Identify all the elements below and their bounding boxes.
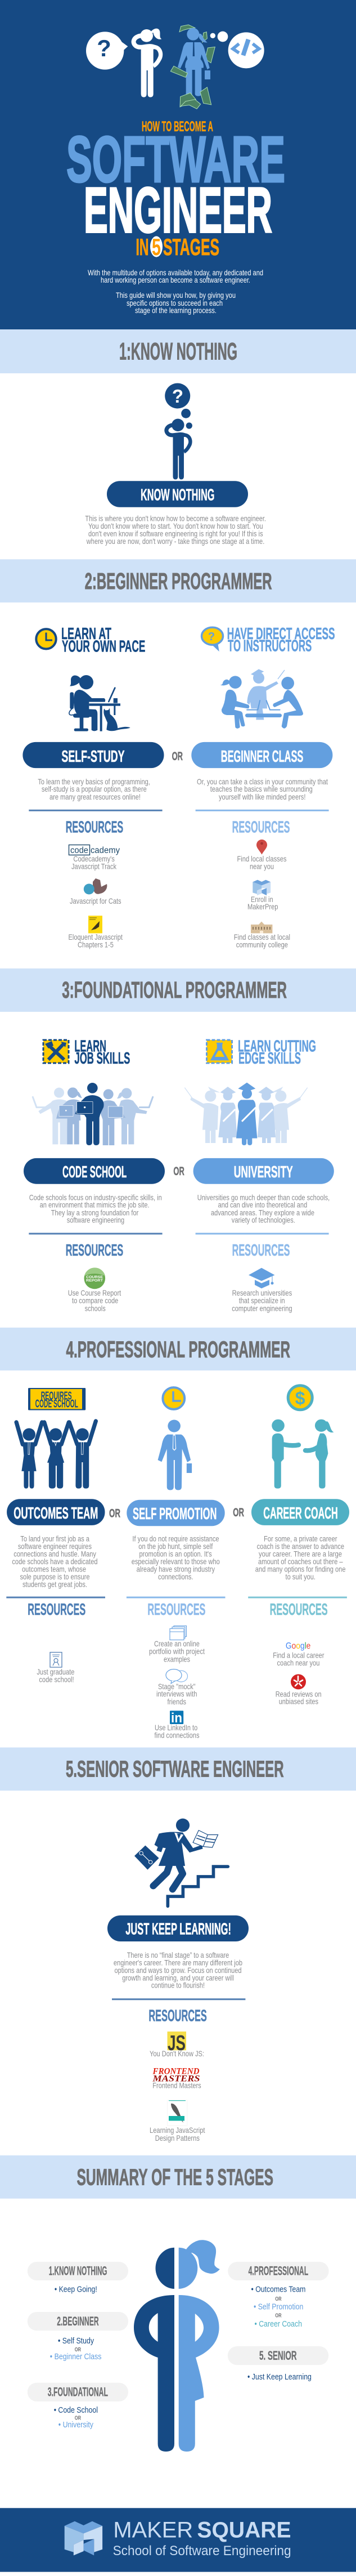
summary: stage 3: • Code School <box>54 2406 98 2415</box>
title: IN <box>136 234 148 260</box>
heading: resources left: RESOURCES <box>66 818 123 836</box>
summary: stage 4: OR <box>275 2312 282 2319</box>
text: outcomes team description: code schools have a dedicated <box>12 1557 98 1566</box>
pill: self-study <box>22 742 164 768</box>
label: or: OR <box>233 1506 244 1519</box>
resource: eloquent javascript: Chapters 1-5 <box>78 940 114 949</box>
pill: self promotion: SELF PROMOTION <box>133 1505 217 1523</box>
resource: local classes: near you <box>250 861 274 870</box>
resource: community college: Find classes at local <box>234 932 290 941</box>
heading: resources right: RESOURCES <box>232 1242 290 1260</box>
summary: stage 1: 1.KNOW NOTHING <box>49 2264 107 2278</box>
summary: stage 4 <box>228 2262 329 2329</box>
resource: mock interviews: friends <box>168 1697 186 1706</box>
resource: research universities: computer engineering <box>232 1303 292 1312</box>
text: code school description: an environment that mimics the job site. <box>40 1200 150 1209</box>
icon: student at laptop with cat <box>69 675 130 731</box>
hero illustration <box>86 25 264 109</box>
summary: stage 2 <box>28 2312 128 2361</box>
resource: community college <box>234 922 290 949</box>
resource: codecademy: Codecademy's <box>73 854 115 863</box>
resource: google: Find a local career <box>273 1651 325 1660</box>
icon: confused woman figure <box>134 29 161 97</box>
text: beginner class description: teaches the basics while surrounding <box>210 784 313 793</box>
pill: code school: CODE SCHOOL <box>62 1163 127 1181</box>
resource: local classes: Find local classes <box>237 854 287 863</box>
summary: stage 4: • Career Coach <box>254 2320 302 2329</box>
summary: stage 3: • University <box>58 2421 94 2430</box>
title: 5 <box>152 234 161 260</box>
illustration: woman climbing stairs <box>134 1819 228 1906</box>
resource: course report <box>68 1267 121 1312</box>
resource: online portfolio <box>170 1626 187 1640</box>
text: beginner class description <box>197 777 328 801</box>
icon: falling money bills front <box>170 66 211 109</box>
pill: just keep learning <box>107 1916 249 1941</box>
text: self promotion description <box>132 1534 220 1581</box>
panel: stage 1 <box>85 383 266 546</box>
text: self-study description: are many great resources online! <box>49 792 141 801</box>
resource: graduate code school: Just graduate <box>37 1667 75 1676</box>
pill: university <box>193 1158 334 1184</box>
intro text: With the multitude of options available today, any dedicated and <box>88 268 263 277</box>
heading: learn job skills: JOB SKILLS <box>74 1050 130 1068</box>
text: outcomes team description: To land your first job as a <box>20 1534 89 1543</box>
wordmark: MAKER <box>113 2518 193 2543</box>
text: university description <box>197 1193 330 1225</box>
text: self promotion description: on the job hunt, simple self <box>138 1542 213 1551</box>
summary: stage 2: 2.BEGINNER <box>57 2314 99 2328</box>
icon: question bubble: ? <box>208 631 215 643</box>
heading: learn job skills <box>74 1037 130 1068</box>
heading: stage 2 <box>0 559 356 602</box>
pill: beginner class <box>191 742 332 768</box>
intro text: This guide will show you how, by giving you <box>116 291 236 300</box>
heading: summary <box>0 2155 356 2199</box>
heading: learn cutting edge skills: EDGE SKILLS <box>238 1050 301 1068</box>
resource: eloquent javascript: Eloquent Javascript <box>69 932 123 941</box>
pill: career coach <box>251 1499 349 1525</box>
text: university description: variety of technologies. <box>232 1216 295 1225</box>
text: portfolio: examples <box>164 1654 190 1663</box>
text: career coach description: For some, a private career <box>264 1534 337 1543</box>
text: stage 5 description: engineer's career. There are many different job <box>114 1958 242 1967</box>
illustration: university graduates <box>184 1083 308 1145</box>
resource: course report: REPORT <box>86 1279 103 1283</box>
panel: stage 3 <box>24 1037 334 1312</box>
heading: resources left: RESOURCES <box>66 1242 123 1260</box>
text: self promotion description: promotion is an option. It's <box>139 1550 212 1559</box>
pill: self promotion <box>127 1500 225 1526</box>
title: STAGES <box>163 234 219 260</box>
resource: research universities: Research universities <box>232 1288 292 1297</box>
text: portfolio: portfolio with project <box>149 1646 205 1655</box>
wordmark: School of Software Engineering <box>113 2543 291 2559</box>
icon: question bubble <box>201 627 223 649</box>
resource: google: Google <box>286 1641 310 1651</box>
panel: stage 5 <box>107 1819 249 2142</box>
text: outcomes team description: software engineer requires <box>18 1542 92 1551</box>
resource: javascript for cats: Javascript for Cats <box>70 896 121 905</box>
resource: yelp <box>276 1674 322 1706</box>
title <box>66 119 285 260</box>
heading: resources middle: RESOURCES <box>147 1601 205 1619</box>
intro text: stage of the learning process. <box>135 306 217 315</box>
resource: you dont know js: You Don't Know JS: <box>150 2049 204 2058</box>
text: stage 1 description: don't even know if software engineering is right for you! If this is <box>88 529 263 538</box>
text: portfolio <box>149 1639 205 1663</box>
text: self-study description: self-study is a popular option, as there <box>42 784 147 793</box>
heading: stage 5 <box>0 1748 356 1791</box>
icon: confused figure <box>166 419 190 480</box>
resource: makerprep: Enroll in <box>251 895 273 904</box>
pill: outcomes team: OUTCOMES TEAM <box>13 1504 98 1523</box>
heading: learn at your own pace <box>61 625 145 655</box>
summary: stage 5: 5. SENIOR <box>259 2349 297 2363</box>
resource: makerprep: MakerPrep <box>247 902 278 911</box>
text: stage 5 description: growth and learning, and your career will <box>122 1973 234 1982</box>
text: stage 1 description: You don't know where to start. You don't know how to start. You <box>88 521 263 530</box>
icon: clock <box>36 629 56 649</box>
resource: course report: to compare code <box>72 1296 118 1305</box>
label: or: OR <box>173 1165 184 1178</box>
resource: course report: schools <box>85 1303 106 1312</box>
resource: graduate code school <box>37 1652 75 1684</box>
heading: stage 3 <box>0 968 356 1012</box>
panel: hero <box>0 0 356 329</box>
icon: falling money bills behind <box>179 25 215 63</box>
illustration: outcomes team <box>16 1421 96 1489</box>
resource: graduate code school: code school! <box>39 1675 74 1684</box>
icon: clock <box>163 1387 184 1409</box>
text: beginner class description: yourself with like minded peers! <box>219 792 305 801</box>
text: outcomes team description: outcomes team, whose <box>22 1565 86 1574</box>
illustration: split figure <box>134 2240 220 2452</box>
pill: self-study: SELF-STUDY <box>61 748 125 766</box>
intro text: hard working person can become a software engineer. <box>101 275 250 284</box>
text: self promotion description: If you do not require assistance <box>132 1534 219 1543</box>
resource: javascript design patterns: Learning JavaScript <box>150 2126 205 2135</box>
resource: google <box>273 1641 325 1667</box>
icon: makersquare logo <box>65 2521 102 2555</box>
resource: mock interviews: interviews with <box>156 1689 197 1698</box>
text: self promotion description: already have strong industry <box>137 1565 215 1574</box>
text: stage 5 description <box>114 1950 242 1990</box>
text: outcomes team description: connections and hustle. Many <box>13 1550 96 1559</box>
resource: google: coach near you <box>277 1658 319 1667</box>
resource: frontend masters: FRONTEND <box>152 2066 200 2077</box>
resource: linkedin: in <box>171 1711 182 1726</box>
wordmark: SQUARE <box>197 2518 291 2543</box>
text: outcomes team description: sole purpose is to ensure <box>20 1572 90 1581</box>
panel: stage 4 <box>6 1386 349 1739</box>
panel: footer <box>0 2508 356 2572</box>
resource: research universities: that specialize in <box>239 1296 285 1305</box>
resource: frontend masters: Frontend Masters <box>152 2081 201 2090</box>
heading: learn job skills: LEARN <box>74 1037 106 1055</box>
summary: stage 1: • Keep Going! <box>55 2285 97 2294</box>
resource: yelp: Read reviews on <box>276 1689 322 1698</box>
label: or: OR <box>172 750 183 763</box>
panel: stage 2 <box>22 625 335 949</box>
text: self-study description: To learn the very basics of programming, <box>38 777 150 786</box>
necktie <box>193 42 195 56</box>
resource: local classes <box>237 840 287 870</box>
icon: question speech bubble: ? <box>97 35 111 61</box>
icon: code bubble <box>228 32 264 68</box>
text: career coach description <box>255 1534 346 1581</box>
summary: stage 4: OR <box>275 2296 282 2302</box>
summary: stage 4: • Outcomes Team <box>251 2285 305 2294</box>
resource: course report: Use Course Report <box>68 1288 121 1297</box>
text: self promotion description: especially relevant to those who <box>132 1557 220 1566</box>
summary: stage 1 <box>28 2262 128 2294</box>
title: HOW TO BECOME A <box>142 119 213 135</box>
icon: dollar coin: $ <box>295 1388 305 1408</box>
text: code school description <box>29 1193 162 1225</box>
text: stage 5 description: continue to flourish! <box>151 1981 205 1990</box>
resource: course report: COURSE <box>86 1275 103 1279</box>
summary: stage 5: • Just Keep Learning <box>247 2373 312 2382</box>
summary: stage 2: OR <box>75 2346 81 2353</box>
heading: direct access <box>227 625 335 655</box>
icon: professional woman figure <box>178 28 210 97</box>
text: code school description: They lay a strong foundation for <box>51 1208 139 1217</box>
heading: stage 1: 1:KNOW NOTHING <box>119 338 237 365</box>
badge: requires code school <box>28 1388 85 1410</box>
resource: codecademy: code <box>70 846 88 855</box>
resource: mock interviews: Stage "mock" <box>158 1682 196 1691</box>
icon: class with instructor <box>220 669 303 729</box>
resource: linkedin: find connections <box>154 1730 199 1739</box>
pill: code school <box>24 1158 165 1184</box>
icon: flask <box>207 1040 232 1063</box>
pill: university: UNIVERSITY <box>234 1163 293 1181</box>
text: career coach description: to suit you. <box>286 1572 316 1581</box>
text: outcomes team description <box>12 1534 98 1589</box>
text: code school description: software engineering <box>67 1216 124 1225</box>
icon: dollar coin <box>288 1386 312 1410</box>
resource: codecademy: Javascript Track <box>71 861 117 870</box>
summary: stage 2: • Self Study <box>58 2337 94 2346</box>
icon: tools <box>43 1040 69 1063</box>
intro text <box>88 268 263 315</box>
resource: linkedin <box>154 1711 199 1739</box>
resource: codecademy: cademy <box>91 846 120 855</box>
illustration: self promotion <box>158 1419 192 1490</box>
wordmark <box>113 2518 291 2559</box>
resource: you dont know js: JS <box>168 2032 186 2055</box>
resource: community college: community college <box>236 940 288 949</box>
icon: question thought bubble <box>165 383 192 429</box>
text: stage 5 description: options and ways to grow. Focus on continued <box>115 1966 242 1975</box>
illustration: career coach <box>272 1419 334 1489</box>
resource: you dont know js <box>150 2032 204 2058</box>
resource: eloquent javascript <box>69 916 123 949</box>
summary: stage 4: • Self Promotion <box>254 2303 303 2312</box>
heading: resources: RESOURCES <box>148 2007 207 2025</box>
resource: linkedin: Use LinkedIn to <box>155 1723 197 1732</box>
summary: stage 3: 3.FOUNDATIONAL <box>48 2385 108 2399</box>
pill: outcomes team <box>7 1499 105 1525</box>
summary: stage 2: • Beginner Class <box>50 2352 101 2361</box>
text: university description: and can dive into theoretical and <box>218 1200 307 1209</box>
text: stage 1 description: This is where you don't know how to become a software engineer. <box>85 514 266 523</box>
label: or: OR <box>109 1507 120 1520</box>
pill: know nothing: KNOW NOTHING <box>141 486 215 505</box>
heading: learn cutting edge skills <box>238 1037 316 1068</box>
heading: resources left: RESOURCES <box>28 1601 85 1619</box>
icon: thought bubbles <box>210 32 228 42</box>
heading: stage 4 <box>0 1328 356 1370</box>
summary: stage 3 <box>28 2383 128 2430</box>
intro text: specific options to succeed in each <box>127 298 223 307</box>
text: outcomes team description: students get great jobs. <box>22 1580 87 1589</box>
resource: makerprep <box>247 880 278 911</box>
text: stage 1 description <box>85 514 266 546</box>
text: self-study description <box>38 777 150 801</box>
badge: requires code school: CODE SCHOOL <box>35 1398 78 1410</box>
pill: just keep learning: JUST KEEP LEARNING! <box>125 1921 231 1939</box>
resource: javascript design patterns: Design Patterns <box>155 2133 200 2142</box>
heading: learn at your own pace: LEARN AT <box>61 625 111 643</box>
summary: stage 3: OR <box>75 2414 81 2421</box>
heading: resources right: RESOURCES <box>232 818 290 836</box>
resource: codecademy <box>69 845 120 870</box>
text: portfolio: Create an online <box>154 1639 200 1648</box>
text: university description: advanced areas. They explore a wide <box>211 1208 314 1217</box>
resource: mock interviews <box>156 1669 197 1706</box>
text: stage 1 description: where you are now, don't worry - take things one stage at a time. <box>86 537 264 546</box>
resource: javascript for cats <box>70 878 121 905</box>
pill: know nothing <box>107 481 248 507</box>
text: code school description: Code schools focus on industry-specific skills, in <box>29 1193 162 1202</box>
icon: question speech bubble <box>86 32 128 70</box>
resource: frontend masters: MASTERS <box>152 2074 200 2083</box>
icon: question thought bubble: ? <box>172 386 183 407</box>
badge: requires code school: REQUIRES <box>41 1390 72 1402</box>
summary: stage 5 <box>228 2346 328 2382</box>
summary: stage 4: 4.PROFESSIONAL <box>249 2264 308 2278</box>
text: stage 5 description: There is no “final stage” to a software <box>127 1950 229 1959</box>
resource: research universities <box>232 1268 292 1312</box>
resource: frontend masters <box>152 2066 201 2090</box>
heading: stage 1 <box>0 329 356 373</box>
text: self promotion description: connections. <box>158 1572 193 1581</box>
panel: summary <box>28 2240 329 2452</box>
resource: javascript design patterns <box>150 2100 205 2142</box>
illustration: code school team <box>33 1083 153 1145</box>
heading: learn at your own pace: YOUR OWN PACE <box>62 637 145 655</box>
resource: yelp: unbiased sites <box>279 1697 318 1706</box>
